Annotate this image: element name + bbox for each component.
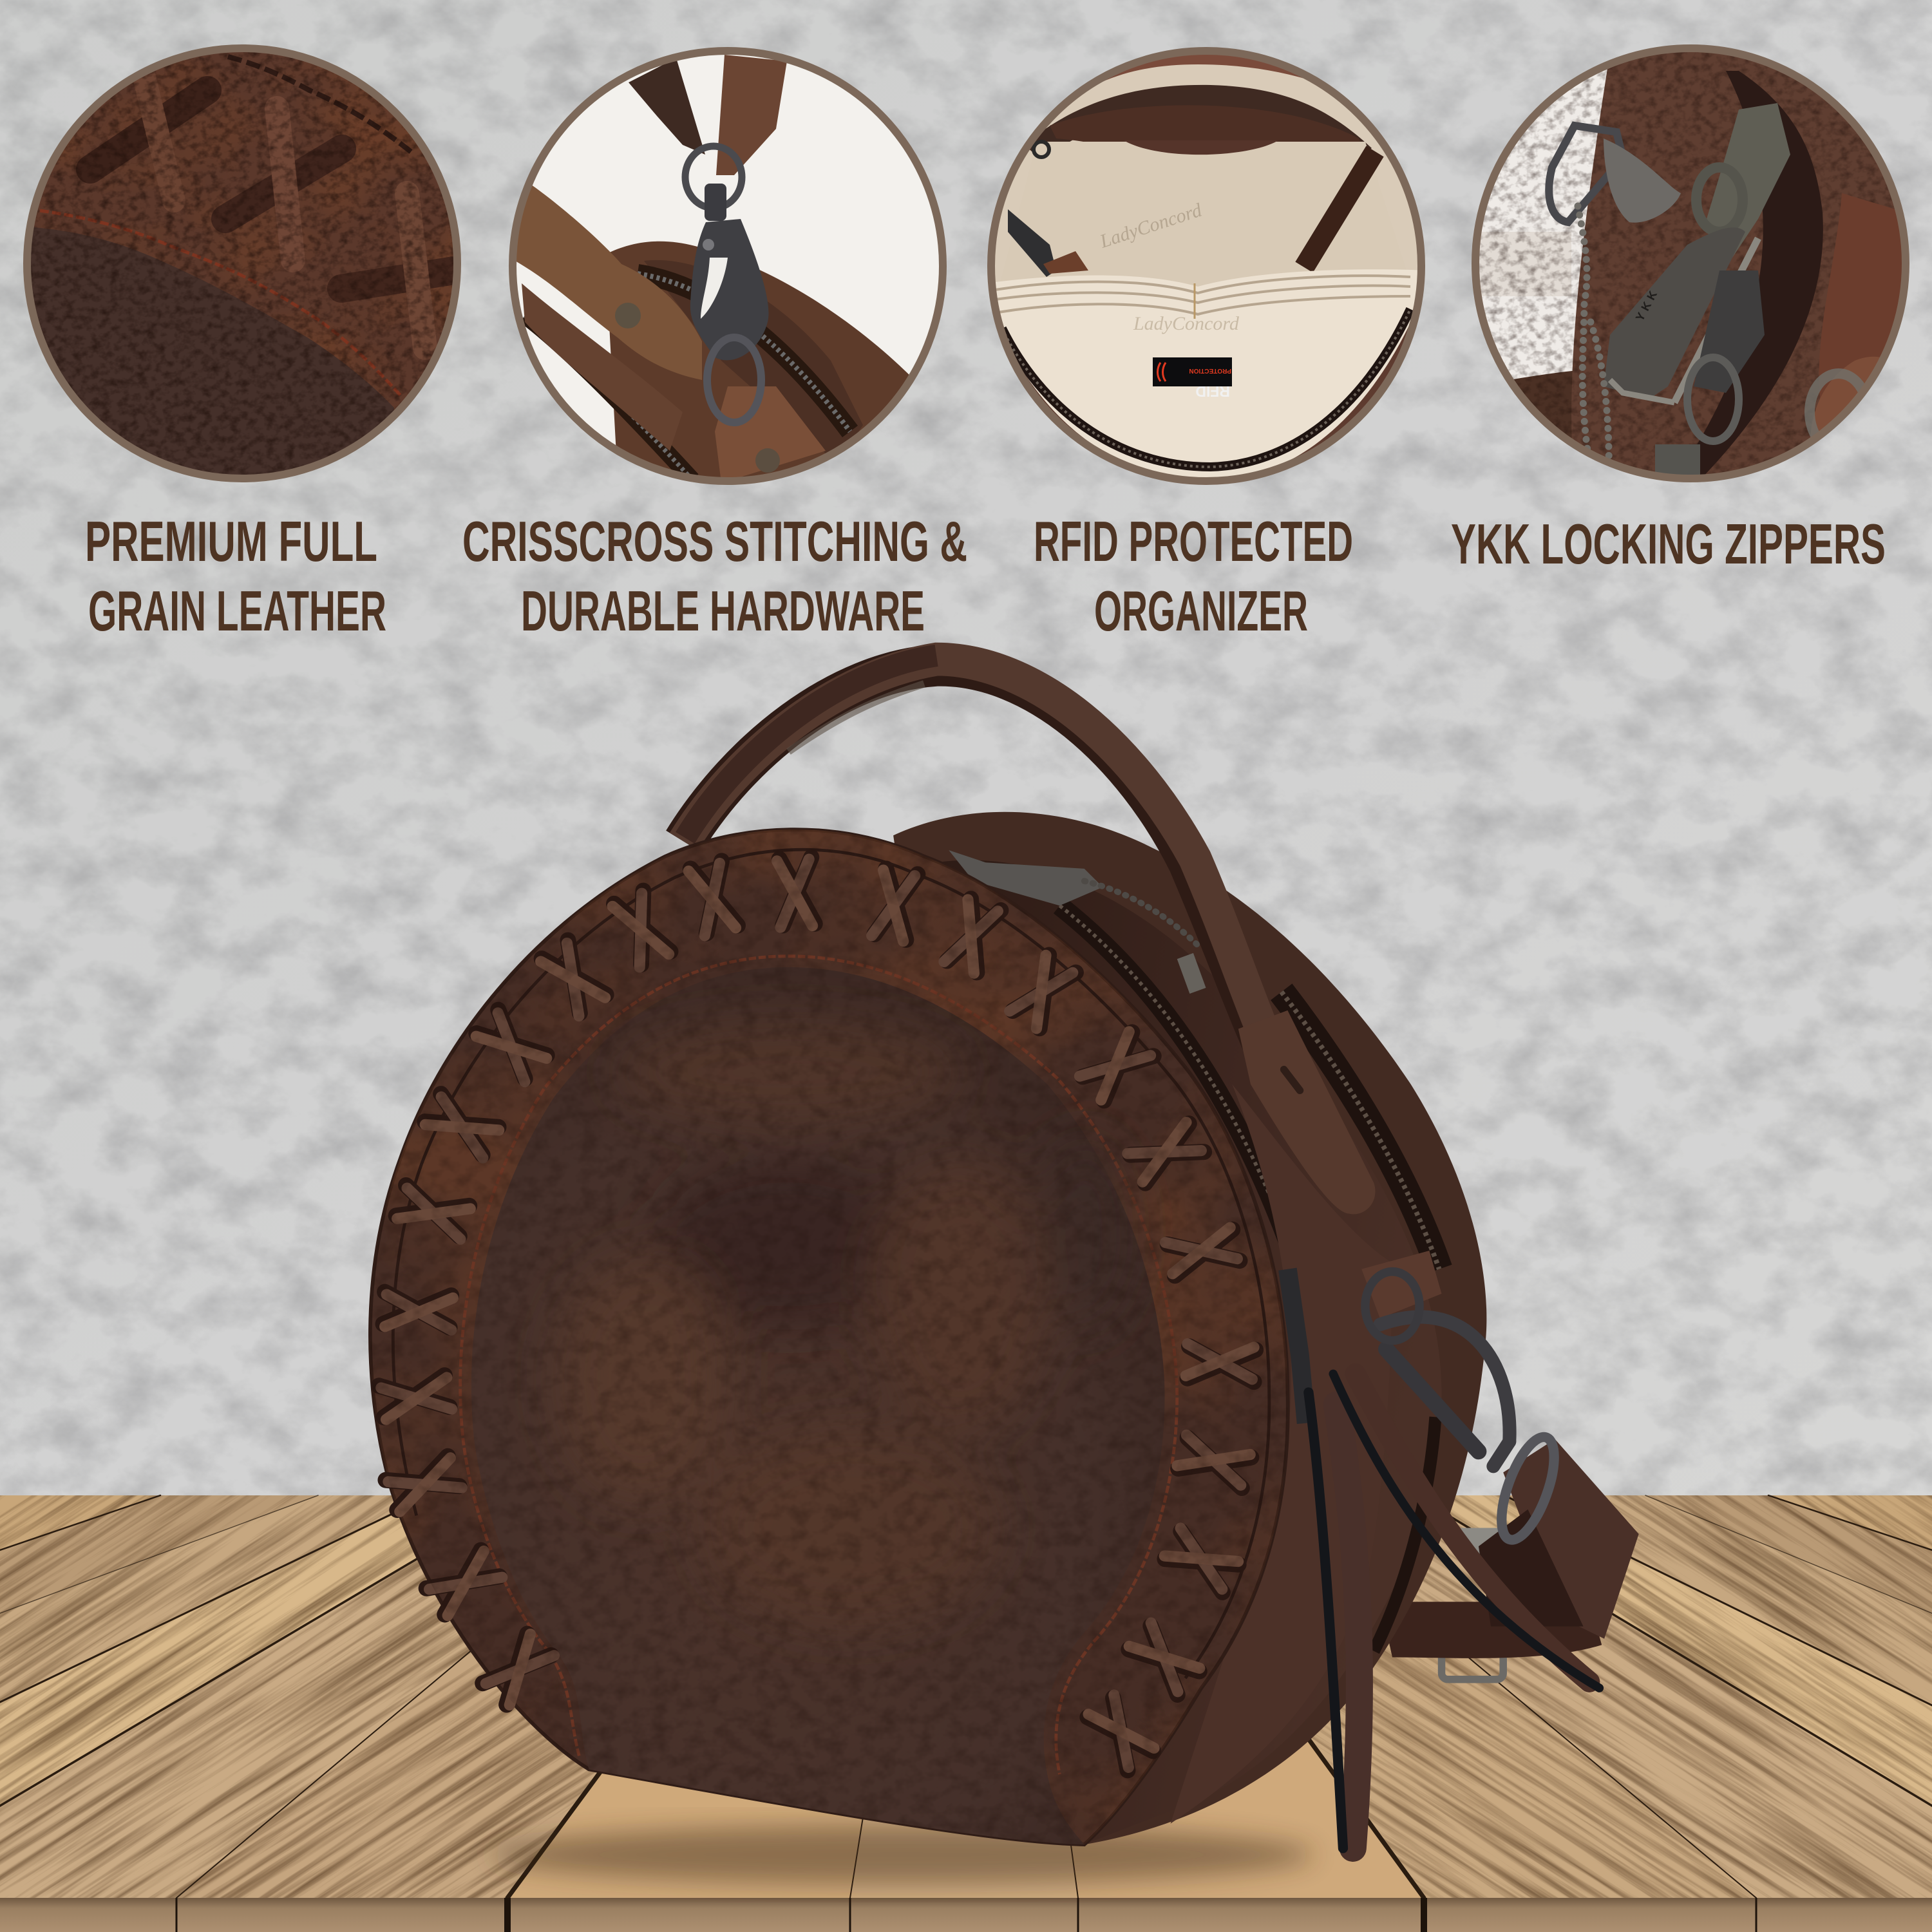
front zipper track (1059, 905, 1439, 1651)
zipper pull top (1034, 142, 1049, 157)
inner clasp (1008, 209, 1088, 277)
bag side gusset (936, 860, 1442, 1844)
snap hook (690, 219, 769, 360)
snap hook (1365, 1271, 1565, 1546)
disc texture (357, 813, 1306, 1861)
fine leather grain (357, 813, 1306, 1861)
zipper tracks (638, 274, 850, 431)
carry handle (684, 656, 1376, 1214)
crisscross stitches (379, 857, 1256, 1770)
inner strap (1304, 151, 1375, 267)
lower pocket (985, 269, 1430, 489)
caption: crisscross stitching and durable hardware: DURABLE HARDWARE (521, 579, 925, 643)
disc edge stitching (393, 849, 1269, 1678)
rim stitching (228, 57, 413, 153)
plank gaps (0, 1495, 1932, 1898)
caption: crisscross stitching and durable hardware: CRISSCROSS STITCHING & (462, 509, 967, 573)
circle photo (26, 45, 464, 489)
strap loop (629, 58, 705, 155)
main product: round leather bag (357, 656, 1639, 1861)
crossed leather strips (90, 77, 454, 348)
RFID label: RFID (1195, 383, 1230, 400)
circle photo (509, 45, 947, 489)
top leather rim (985, 45, 1430, 167)
circle photo (1468, 45, 1913, 483)
lower ring (707, 337, 761, 422)
grey ring (1810, 374, 1868, 451)
RFID label: PROTECTION (1189, 367, 1231, 374)
d-ring (1549, 126, 1623, 222)
zipper gap (1674, 71, 1823, 480)
caption: premium full grain leather: PREMIUM FULL (85, 509, 377, 573)
zipper pulls with cords (1287, 1269, 1599, 1848)
bag shadow on floor (489, 1825, 1314, 1884)
circle ring (1475, 48, 1906, 478)
lining upper (995, 142, 1417, 303)
top zipper (1024, 85, 1372, 164)
lower tab (715, 386, 826, 483)
top zipper pull (949, 850, 1206, 994)
lower slider (1694, 270, 1765, 393)
detail circle 3: RFID organizer (979, 45, 1443, 496)
panel blotches (554, 1023, 1133, 1627)
circle photo (979, 45, 1443, 496)
back rim of the bag (893, 812, 1486, 1844)
triangular pull (1604, 138, 1681, 223)
middle gusset panel (1171, 1084, 1392, 1824)
detail circle 2: clasp and hardware (509, 45, 947, 489)
front disc (370, 829, 1288, 1844)
watermark 2: LadyConcord (1133, 313, 1240, 334)
circle ring (513, 51, 943, 481)
caption: premium full grain leather: GRAIN LEATHER (88, 579, 386, 643)
circle ring (27, 48, 457, 478)
caption: RFID protected organizer: ORGANIZER (1094, 579, 1308, 643)
circle ring (991, 51, 1421, 481)
detail circle 4: YKK zippers (1468, 45, 1913, 483)
right leather tab (1819, 193, 1906, 419)
detail circle 1: leather (26, 45, 464, 489)
circle photo: YKK (1633, 285, 1662, 323)
YKK pull (1604, 227, 1745, 399)
swivel ring (685, 146, 742, 208)
ball chains (1578, 206, 1589, 464)
caption: RFID protected organizer: RFID PROTECTED (1034, 509, 1353, 573)
wood grain (0, 1495, 595, 1898)
centre panel (471, 967, 1165, 1844)
bottom zipper band (979, 309, 1443, 496)
rivet (615, 303, 641, 328)
dark centre panel (26, 225, 394, 489)
RFID label (1153, 357, 1232, 400)
caption: premium full grain leather (85, 509, 386, 643)
inner flap (1050, 105, 1365, 160)
panel stitching (40, 211, 401, 395)
caption: crisscross stitching and durable hardware (462, 509, 967, 643)
background: plaster wall (0, 0, 1932, 1495)
planks (0, 1495, 1932, 1898)
leather body (1571, 48, 1913, 483)
wooden floor (0, 1494, 1932, 1932)
handle tab (1238, 1010, 1376, 1214)
back rim of bag (605, 242, 947, 489)
caption: RFID protected organizer (1034, 509, 1353, 643)
pocket pleats (995, 276, 1410, 314)
watermark: LadyConcord (1097, 199, 1205, 252)
rear strap and buckle (1380, 1439, 1639, 1680)
strap loop (1361, 1251, 1442, 1318)
panel stitching (460, 956, 1177, 1774)
floor front edge (0, 1898, 1932, 1932)
upper slider (1707, 103, 1790, 258)
